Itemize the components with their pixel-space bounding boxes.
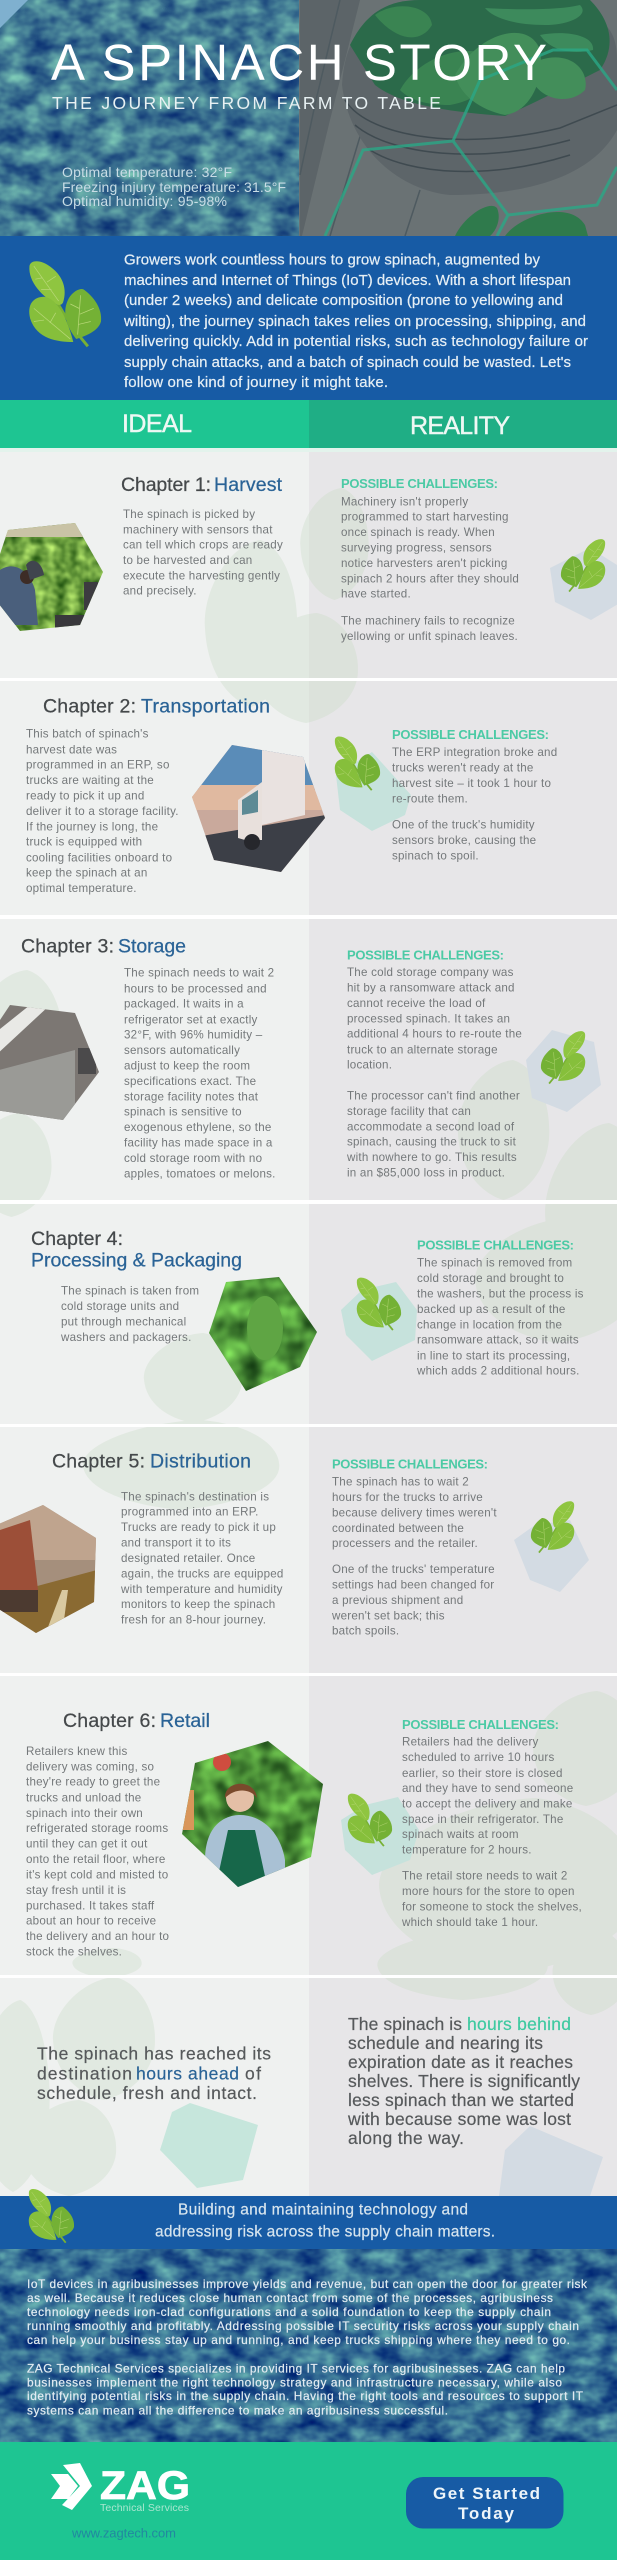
reality text: to accept the delivery and make <box>402 1798 573 1810</box>
ideal text: with temperature and humidity <box>120 1583 283 1596</box>
heading: chapter 1 <box>121 474 283 496</box>
heading: chapter 3: Chapter 3: <box>21 936 114 958</box>
logo: zag technical services <box>51 2463 190 2514</box>
reality text: change in location from the <box>417 1318 562 1331</box>
ideal text <box>120 1490 284 1627</box>
body text: as well. Because it reduces close human contact from some of the processes, agribusiness <box>27 2291 553 2305</box>
hexagon: pale blue <box>526 1030 601 1112</box>
reality text: spinach to spoil. <box>392 849 479 862</box>
ideal text: onto the retail floor, where <box>26 1853 166 1866</box>
reality text: location. <box>347 1059 392 1072</box>
reality text: spinach waits at room <box>402 1828 519 1841</box>
ideal text: spinach into their own <box>26 1807 143 1820</box>
possible challenges heading: POSSIBLE CHALLENGES: <box>332 1457 488 1472</box>
optimal storage conditions: Optimal temperature: 32°F <box>62 164 232 180</box>
panel: chapter 3 storage <box>0 936 601 1180</box>
reality text: ransomware attack, so it waits <box>417 1334 579 1347</box>
photo: spinach field <box>0 0 300 236</box>
ideal text: programmed into an ERP. <box>121 1506 259 1519</box>
reality text: a previous shipment and <box>332 1594 463 1607</box>
reality text: space in their refrigerator. The <box>402 1813 564 1826</box>
ideal text <box>26 1745 169 1959</box>
reality text: Retailers had the delivery <box>402 1736 539 1749</box>
ideal text: storage facility notes that <box>124 1090 259 1103</box>
intro text: wilting), the journey spinach takes relies on processing, shipping, and <box>123 313 586 330</box>
ideal outcome: destination <box>37 2064 132 2084</box>
ideal text: packaged. It waits in a <box>124 998 244 1011</box>
reality text: re-route them. <box>392 792 468 805</box>
ideal text: delivery was coming, so <box>26 1760 154 1773</box>
ideal text: sensors automatically <box>124 1044 240 1057</box>
logo: zag technical services: ZAG <box>100 2464 190 2508</box>
ideal text: put through mechanical <box>61 1316 186 1329</box>
ideal text: truck is equipped with <box>26 836 142 849</box>
icon: spinach leaves <box>541 1031 585 1084</box>
heading: chapter 4: Chapter 4: <box>31 1228 123 1250</box>
ideal outcome: The spinach has reached its <box>37 2044 271 2064</box>
ideal text: The spinach is picked by <box>123 508 255 521</box>
hexagon: pale teal <box>341 1797 419 1875</box>
header: farm and bowl photo <box>0 0 617 236</box>
body text: systems can mean all the difference to make an agribusiness successful. <box>27 2404 448 2418</box>
hexagon: pale blue <box>514 1520 589 1592</box>
ideal text: programmed in an ERP, so <box>26 759 170 772</box>
ideal text: stock the shelves. <box>26 1946 122 1959</box>
possible challenges heading: POSSIBLE CHALLENGES: <box>341 476 498 491</box>
reality text: The spinach has to wait 2 <box>332 1476 469 1489</box>
heading: chapter 3 <box>21 936 186 958</box>
reality text: notice harvesters aren't picking <box>341 557 508 570</box>
ideal outcome: hours ahead <box>136 2064 239 2084</box>
reality outcome: with because some was lost <box>347 2109 571 2129</box>
hexagon: pale teal <box>341 1282 417 1361</box>
ideal text: specifications exact. The <box>124 1075 256 1088</box>
reality text <box>416 1257 584 1378</box>
reality text: The retail store needs to wait 2 <box>402 1870 568 1883</box>
icon: spinach leaves <box>531 1501 574 1553</box>
reality text: The cold storage company was <box>347 966 514 979</box>
reality text: truck to an alternate storage <box>347 1043 498 1056</box>
ideal text: optimal temperature. <box>26 882 137 895</box>
heading: chapter 6: Retail <box>160 1710 210 1732</box>
intro text: supply chain attacks, and a batch of spinach could be wasted. Let's <box>124 354 571 371</box>
reality text: cannot receive the load of <box>347 997 486 1010</box>
reality text: spinach 2 hours after they should <box>341 572 519 585</box>
logo: zag technical services: Technical Services <box>100 2502 189 2514</box>
reality text: and they have to send someone <box>402 1782 573 1795</box>
possible challenges heading: POSSIBLE CHALLENGES: <box>347 948 504 963</box>
reality text: with nowhere to go. This results <box>346 1151 517 1164</box>
reality text: in line to start its processing, <box>417 1349 570 1362</box>
reality text: backed up as a result of the <box>417 1303 566 1316</box>
ideal text: deliver it to a storage facility. <box>26 805 179 818</box>
possible challenges heading: POSSIBLE CHALLENGES: <box>392 727 549 742</box>
reality outcome: shelves. There is significantly <box>348 2071 580 2091</box>
hexagon: pale teal <box>160 2103 258 2188</box>
ideal text: cold storage room with no <box>124 1152 262 1165</box>
ideal text: cold storage units and <box>61 1300 179 1313</box>
photo: grocer with produce <box>180 1740 325 1890</box>
optimal storage conditions: Optimal humidity: 95-98% <box>62 193 227 209</box>
reality text: the washers, but the process is <box>417 1287 584 1300</box>
column headers <box>0 400 617 448</box>
possible challenges heading: POSSIBLE CHALLENGES: <box>402 1717 559 1732</box>
heading: chapter 1: Chapter 1: <box>121 474 211 496</box>
ideal text: execute the harvesting gently <box>123 569 280 582</box>
panel: about zag <box>0 2249 617 2443</box>
ideal text: again, the trucks are equipped <box>121 1568 284 1580</box>
hexagon: pale teal <box>336 752 411 831</box>
reality text: once spinach is ready. When <box>341 526 495 539</box>
reality text: processers and the retailer. <box>332 1537 478 1550</box>
ideal text: The spinach needs to wait 2 <box>124 967 274 980</box>
ideal text <box>26 728 179 895</box>
body text <box>27 2277 587 2418</box>
hexagon: pale blue <box>499 2126 603 2196</box>
body text: identifying potential risks in the supply chain. Having the right tools and resources to support IT <box>27 2389 583 2403</box>
body text: businesses implement the right technology strategy and infrastructure necessary, while also <box>27 2375 562 2389</box>
reality text <box>331 1476 497 1638</box>
reality text: One of the trucks' temperature <box>332 1563 495 1576</box>
photo: spinach field tinted blue <box>0 2249 617 2443</box>
panel: outcomes <box>37 2014 603 2196</box>
reality text: The spinach is removed from <box>417 1257 572 1270</box>
photo: truck on highway <box>190 745 326 873</box>
panel: chapter 4 processing and packaging <box>31 1228 584 1393</box>
ideal text: If the journey is long, the <box>26 820 158 833</box>
ideal text: and transport it to its <box>121 1536 231 1549</box>
icon: spinach leaves <box>335 737 380 790</box>
reality outcome: The spinach is <box>348 2014 462 2034</box>
reality text: more hours for the store to open <box>402 1885 575 1898</box>
ideal text: adjust to keep the room <box>124 1059 250 1072</box>
ideal text: and precisely. <box>123 585 197 598</box>
optimal storage conditions <box>62 164 286 209</box>
heading: chapter 5: Chapter 5: <box>52 1450 145 1472</box>
heading: ideal: IDEAL <box>122 410 192 438</box>
ideal text: monitors to keep the spinach <box>121 1598 275 1611</box>
icon: spinach leaves <box>29 2189 74 2243</box>
conclusion band <box>0 2189 617 2249</box>
photo: spinach bowl on wood table <box>299 0 617 236</box>
icon: spinach leaves <box>29 261 101 346</box>
ideal text: 32°F, with 96% humidity – <box>124 1029 263 1042</box>
intro text: follow one kind of journey it might take. <box>124 374 388 391</box>
optimal storage conditions: Freezing injury temperature: 31.5°F <box>62 179 286 195</box>
ideal text: it's kept cold and misted to <box>26 1869 168 1882</box>
website link: www.zagtech.com <box>71 2526 176 2540</box>
ideal text: apples, tomatoes or melons. <box>124 1167 276 1180</box>
ideal text: facility has made space in a <box>124 1137 273 1150</box>
intro text: machines and Internet of Things (IoT) devices. With a short lifespan <box>124 272 571 289</box>
ideal text: the delivery and an hour to <box>26 1930 169 1943</box>
reality text <box>341 495 519 643</box>
footer <box>0 2442 617 2560</box>
ideal text: ready to pick it up and <box>26 790 144 803</box>
body text: running smoothly and profitably. Addressing possible IT security risks across your supply chain <box>27 2319 579 2333</box>
reality text <box>401 1736 582 1929</box>
button: get started today <box>406 2477 564 2528</box>
reality text: The ERP integration broke and <box>392 746 557 759</box>
reality outcome <box>347 2014 580 2148</box>
reality text: programmed to start harvesting <box>341 511 509 524</box>
possible challenges heading: POSSIBLE CHALLENGES: <box>417 1237 574 1252</box>
heading: chapter 2: Transportation <box>141 696 270 718</box>
ideal text: This batch of spinach's <box>26 728 149 741</box>
reality text: The processor can't find another <box>347 1089 520 1102</box>
photo: washed spinach <box>205 1275 320 1393</box>
icon: spinach leaves <box>561 539 605 592</box>
reality text: in an $85,000 loss in product. <box>347 1167 505 1180</box>
ideal text: to be harvested and can <box>123 554 252 567</box>
hexagon: pale blue <box>550 548 617 620</box>
heading: chapter 6: Chapter 6: <box>63 1710 156 1732</box>
reality text: have started. <box>341 588 411 601</box>
intro band <box>0 236 617 400</box>
title: A SPINACH STORY <box>51 34 547 91</box>
heading: chapter 2: Chapter 2: <box>43 696 136 718</box>
reality text <box>346 966 522 1180</box>
reality outcome: expiration date as it reaches <box>348 2052 573 2072</box>
ideal text: machinery with sensors that <box>123 523 273 536</box>
ideal text: The spinach's destination is <box>121 1490 269 1503</box>
conclusion text: Building and maintaining technology and <box>178 2202 468 2219</box>
ideal text: exogenous ethylene, so the <box>124 1121 272 1134</box>
heading: reality: REALITY <box>410 412 510 440</box>
reality text: The machinery fails to recognize <box>341 614 515 627</box>
ideal text: washers and packagers. <box>60 1331 192 1344</box>
ideal text: hours to be processed and <box>124 982 267 995</box>
ideal text: refrigerated storage rooms <box>26 1822 168 1835</box>
ideal text: until they can get it out <box>26 1838 148 1850</box>
ideal outcome <box>37 2044 271 2103</box>
heading: chapter 5 <box>52 1450 251 1472</box>
photo: refrigerated storage room <box>0 1005 100 1125</box>
reality text: additional 4 hours to re-route the <box>347 1028 522 1041</box>
intro text: (under 2 weeks) and delicate composition (prone to yellowing and <box>124 292 563 309</box>
ideal text: Trucks are ready to pick it up <box>121 1521 276 1534</box>
reality text: hours for the trucks to arrive <box>332 1491 483 1504</box>
ideal text: spinach is sensitive to <box>124 1106 242 1119</box>
icon: spinach leaves <box>357 1278 401 1330</box>
heading: chapter 5: Distribution <box>150 1450 251 1472</box>
reality text: Machinery isn't properly <box>341 495 468 508</box>
body text: ZAG Technical Services specializes in providing IT services for agribusinesses. ZAG can help <box>27 2361 565 2375</box>
reality text: sensors broke, causing the <box>392 834 536 847</box>
reality text: weren't set back; this <box>331 1609 445 1622</box>
reality text: which adds 2 additional hours. <box>416 1365 580 1378</box>
ideal text: trucks are waiting at the <box>26 774 154 787</box>
body text: can help your business stay up and running, and keep trucks shipping where they need to go. <box>27 2333 570 2347</box>
ideal text: trucks and unload the <box>26 1791 141 1804</box>
panel: chapter 1 harvest <box>0 474 617 643</box>
reality outcome: less spinach than we started <box>348 2090 574 2110</box>
ideal text: Retailers knew this <box>26 1745 127 1758</box>
reality text: yellowing or unfit spinach leaves. <box>341 630 518 643</box>
button: get started today: Today <box>458 2504 515 2523</box>
ideal text: refrigerator set at exactly <box>124 1013 258 1026</box>
conclusion text: addressing risk across the supply chain matters. <box>155 2224 495 2240</box>
ideal text: harvest date was <box>26 743 117 756</box>
subtitle: THE JOURNEY FROM FARM TO TABLE <box>52 93 441 113</box>
conclusion text <box>155 2202 495 2240</box>
heading: chapter 1: Harvest <box>214 474 283 496</box>
reality text: for someone to stock the shelves, <box>402 1901 582 1914</box>
ideal text <box>123 508 283 598</box>
reality text: accommodate a second load of <box>347 1120 515 1133</box>
reality outcome: along the way. <box>348 2128 464 2148</box>
reality text: trucks weren't ready at the <box>392 762 534 775</box>
ideal text: can tell which crops are ready <box>123 539 283 552</box>
ideal outcome: of <box>245 2064 261 2084</box>
body text: IoT devices in agribusinesses improve yields and revenue, but can open the door for greater risk <box>27 2277 587 2291</box>
heading: chapter 3: Storage <box>118 936 186 958</box>
ideal text <box>124 967 276 1180</box>
reality text: earlier, so their store is closed <box>402 1767 563 1780</box>
reality text: cold storage and brought to <box>417 1272 564 1285</box>
reality text: spinach, causing the truck to sit <box>347 1136 517 1149</box>
reality text: One of the truck's humidity <box>392 818 535 831</box>
divider lines <box>0 678 617 1978</box>
reality text: settings had been changed for <box>332 1579 494 1592</box>
photo: farm workers harvesting <box>0 523 104 631</box>
body text: technology needs iron-clad configurations and a solid foundation to keep the supply chain <box>27 2305 551 2319</box>
reality text <box>392 746 557 862</box>
panel: chapter 2 transportation <box>26 696 557 895</box>
reality text: storage facility that can <box>347 1105 471 1118</box>
heading: chapter 6 <box>63 1710 210 1732</box>
reality text: surveying progress, sensors <box>341 542 492 555</box>
heading: chapter 4: Processing & Packaging <box>31 1250 242 1272</box>
reality text: because delivery times weren't <box>332 1506 497 1519</box>
panel: chapter 6 retail <box>26 1710 582 1959</box>
hexagon outline accent <box>325 50 617 236</box>
intro text: Growers work countless hours to grow spinach, augmented by <box>124 252 540 268</box>
ideal outcome: schedule, fresh and intact. <box>37 2083 257 2103</box>
photo: truck on country road <box>0 1505 97 1635</box>
reality text: processed spinach. It takes an <box>347 1012 510 1025</box>
reality text: scheduled to arrive 10 hours <box>402 1751 554 1764</box>
ideal text: stay fresh until it is <box>26 1884 126 1897</box>
reality text: coordinated between the <box>332 1522 464 1535</box>
ideal text: keep the spinach at an <box>26 867 148 880</box>
heading: chapter 2 <box>43 696 270 718</box>
intro text <box>123 252 588 391</box>
column backgrounds and watermark leaves <box>0 448 617 2196</box>
reality text: batch spoils. <box>332 1625 399 1638</box>
reality text: harvest site – it took 1 hour to <box>392 777 551 790</box>
ideal text: designated retailer. Once <box>121 1552 255 1565</box>
reality outcome: hours behind <box>467 2014 571 2034</box>
button: get started today: Get Started <box>433 2484 540 2503</box>
ideal text: The spinach is taken from <box>61 1285 199 1298</box>
ideal text: purchased. It takes staff <box>26 1899 155 1912</box>
reality text: which should take 1 hour. <box>401 1916 538 1929</box>
heading: chapter 4 <box>31 1228 242 1272</box>
icon: spinach leaves <box>348 1794 392 1846</box>
ideal text: cooling facilities onboard to <box>26 851 172 864</box>
ideal text <box>60 1285 199 1344</box>
reality text: temperature for 2 hours. <box>402 1844 532 1857</box>
reality outcome: schedule and nearing its <box>348 2033 543 2053</box>
reality text: hit by a ransomware attack and <box>347 982 515 995</box>
ideal text: about an hour to receive <box>26 1915 156 1928</box>
panel: chapter 5 distribution <box>0 1450 589 1638</box>
ideal text: they're ready to greet the <box>26 1776 160 1789</box>
intro text: delivering quickly. Add in potential risks, such as technology failure or <box>124 333 588 350</box>
ideal text: fresh for an 8-hour journey. <box>121 1614 266 1627</box>
